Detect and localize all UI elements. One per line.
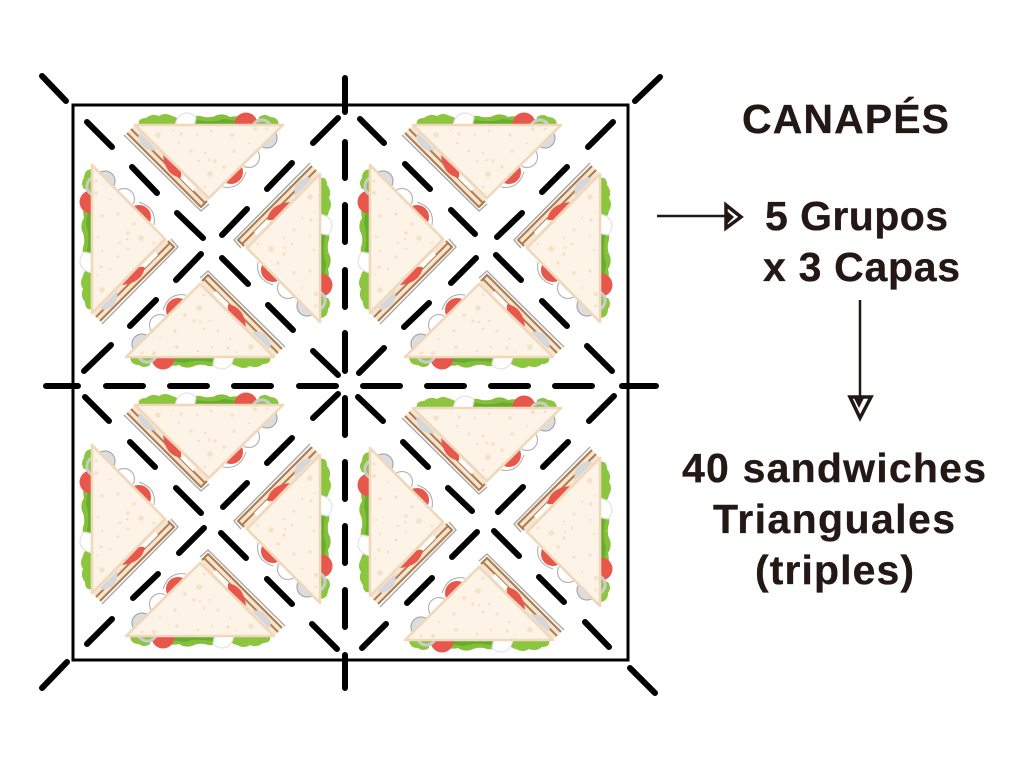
sandwich: bottom [405, 552, 565, 652]
sandwich: right [512, 446, 612, 606]
sandwich: right [232, 162, 332, 322]
diagonals bottom right [358, 396, 614, 648]
text: total sandwiches: 40 sandwiches [682, 445, 986, 491]
sandwich: top [123, 392, 283, 493]
sandwich: left [358, 448, 458, 608]
panel: sandwich group bottom left [80, 392, 332, 648]
panel: sandwich group top left [80, 112, 332, 370]
text: triangular: Trianguales [713, 496, 955, 542]
title: CANAPÉS [742, 96, 949, 142]
sandwich: right [512, 162, 612, 322]
cut lines: dashed guides [42, 76, 660, 693]
panel: sandwich group top right [358, 112, 612, 370]
text: groups: 5 Grupos [765, 193, 948, 239]
vertical centre cut line [342, 78, 348, 688]
sandwich: bottom [405, 269, 565, 370]
outer corner cuts [42, 76, 660, 693]
sandwich: top [401, 396, 561, 496]
panel: sandwich group bottom right [358, 396, 612, 652]
sandwich: left [358, 165, 458, 325]
horizontal centre cut line [46, 383, 656, 389]
diagonals top left [84, 118, 338, 375]
sandwich: left [80, 165, 180, 325]
frame: square tray outline [73, 105, 628, 660]
sandwich: left [80, 445, 180, 605]
sandwich: right [232, 443, 332, 603]
diagonals top right [359, 119, 613, 373]
sandwich: bottom [126, 269, 286, 370]
diagonals bottom left [85, 394, 338, 649]
sandwich: bottom [126, 548, 286, 648]
sandwich: top [123, 112, 283, 213]
arrow: right [657, 205, 741, 228]
arrow: down [850, 300, 871, 418]
text: triples: (triples) [755, 547, 914, 593]
text: layers: x 3 Capas [763, 244, 960, 290]
sandwich: top [401, 112, 561, 213]
